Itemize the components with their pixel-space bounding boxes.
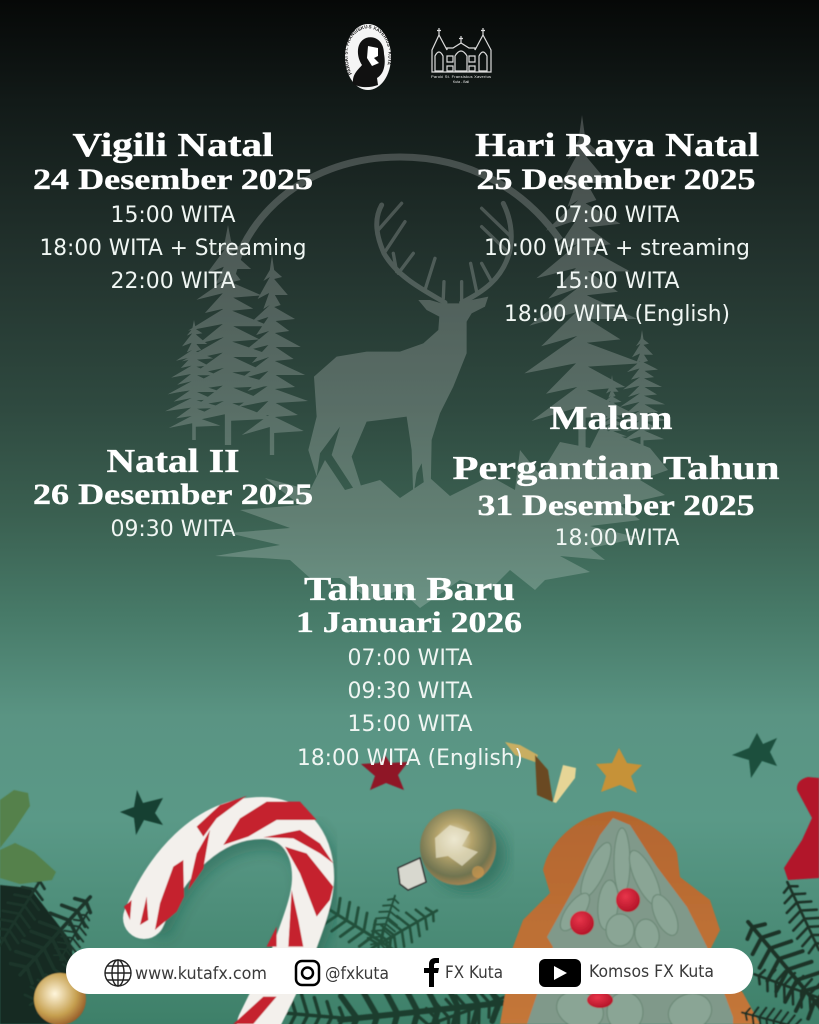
facebook name: FX Kuta xyxy=(445,963,503,983)
block: Malam Pergantian Tahun: Malam xyxy=(550,400,672,437)
logo: church outline: Kuta - Bali xyxy=(453,80,469,84)
deer silhouette xyxy=(308,203,511,497)
star red xyxy=(361,755,408,790)
block: Natal II: 09:30 WITA xyxy=(110,516,236,542)
illustration: deer and forest inside arc xyxy=(165,115,668,608)
pine branches left xyxy=(0,869,106,1024)
block: Malam Pergantian Tahun: Pergantian Tahun xyxy=(452,450,780,487)
decoration: foreground Christmas flat lay xyxy=(0,733,819,1024)
small bauble xyxy=(34,973,86,1024)
star dark right xyxy=(732,733,777,778)
block: Hari Raya Natal: 25 Desember 2025 xyxy=(476,163,756,196)
block: Hari Raya Natal: Hari Raya Natal xyxy=(475,127,759,164)
block: Tahun Baru: Tahun Baru xyxy=(304,571,515,608)
star gold xyxy=(596,748,642,793)
logo: church outline xyxy=(431,28,491,84)
star dark left xyxy=(120,790,163,835)
block: Vigili Natal xyxy=(33,127,313,294)
icon: instagram xyxy=(296,961,319,985)
pine branches right xyxy=(730,876,819,1024)
pine sprig center xyxy=(313,891,444,964)
block: Tahun Baru: 09:30 WITA xyxy=(348,678,473,704)
logo: church outline: Paroki St. Fransiskus Xaverius xyxy=(431,74,491,79)
block: Tahun Baru: 1 Januari 2026 xyxy=(296,606,522,639)
bauble xyxy=(398,809,506,891)
logos xyxy=(345,24,492,90)
block: Tahun Baru xyxy=(296,571,523,771)
block: Tahun Baru: 18:00 WITA (English) xyxy=(297,745,523,771)
social bar xyxy=(66,948,753,994)
block: Hari Raya Natal: 10:00 WITA + streaming xyxy=(484,235,750,261)
block: Tahun Baru: 07:00 WITA xyxy=(348,645,473,671)
arc xyxy=(226,157,560,320)
block: Hari Raya Natal: 18:00 WITA (English) xyxy=(504,301,730,327)
icon: youtube xyxy=(539,959,581,987)
candy cane xyxy=(124,796,333,1024)
ground xyxy=(215,428,668,608)
ribbon xyxy=(505,742,576,803)
pine branches under bar xyxy=(248,968,513,1024)
block: Malam Pergantian Tahun: 18:00 WITA xyxy=(554,525,680,551)
block: Natal II: Natal II xyxy=(106,443,240,480)
icon: facebook xyxy=(424,958,439,987)
block: Hari Raya Natal: 15:00 WITA xyxy=(554,268,680,294)
candy cane shadow xyxy=(150,830,320,965)
instagram handle: @fxkuta xyxy=(325,964,389,984)
gingerbread tree cookie xyxy=(500,811,760,1024)
block: Hari Raya Natal xyxy=(475,127,759,327)
glitter star left xyxy=(0,790,56,884)
block: Tahun Baru: 15:00 WITA xyxy=(348,711,473,737)
logo: parish seal: PAROKI ST. FRANSISKUS XAVERIUS - KUTA xyxy=(345,24,391,75)
block: Natal II: 26 Desember 2025 xyxy=(33,478,313,511)
block: Vigili Natal: 18:00 WITA + Streaming xyxy=(40,235,306,261)
trees: left group xyxy=(165,225,308,455)
block: Vigili Natal: 22:00 WITA xyxy=(110,268,236,294)
website: www.kutafx.com xyxy=(135,964,267,984)
block: Malam Pergantian Tahun xyxy=(452,400,780,551)
block: Malam Pergantian Tahun: 31 Desember 2025 xyxy=(478,489,754,522)
red glitter star right xyxy=(784,777,819,880)
block: Vigili Natal: 24 Desember 2025 xyxy=(33,163,313,196)
youtube channel: Komsos FX Kuta xyxy=(589,962,714,982)
block: Vigili Natal: 15:00 WITA xyxy=(110,202,236,228)
block: Hari Raya Natal: 07:00 WITA xyxy=(554,202,680,228)
icon: globe xyxy=(105,960,131,986)
trees: right group xyxy=(524,115,667,459)
block: Vigili Natal: Vigili Natal xyxy=(72,127,274,164)
block: Natal II xyxy=(33,443,313,542)
